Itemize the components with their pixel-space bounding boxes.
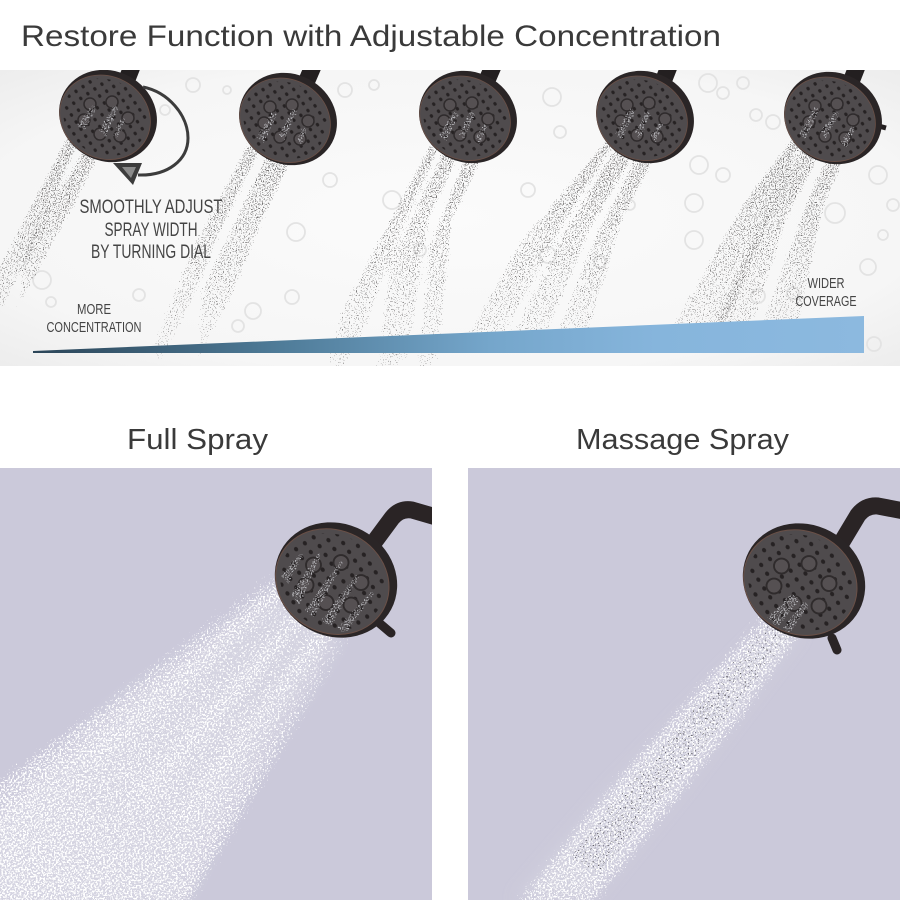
full spray shower arm [372,510,436,545]
full spray water [0,568,356,900]
shower head 1 [59,70,157,162]
icon: curved dial-turn arrow [113,87,188,185]
shower head 5 [784,70,887,164]
panel: massage spray [468,468,900,900]
water droplet texture [33,74,899,351]
massage spray water over nozzles [768,594,808,632]
full spray water over nozzles [280,552,375,634]
water streaks over heads [76,104,856,150]
full spray dial knob [378,622,391,633]
spray 5 [674,139,803,324]
gradient wedge scale [33,316,864,353]
massage spray dark droplets [570,626,790,874]
label: wider coverage: WIDER [808,275,845,292]
callout: smoothly adjust spray width: SMOOTHLY ADJUST [80,197,223,218]
shower head 3 [419,70,517,164]
label: wider coverage: COVERAGE [796,293,856,310]
heading: full spray: Full Spray [127,424,269,456]
heading: massage spray: Massage Spray [576,424,790,456]
massage spray shower head [742,523,866,639]
panel: adjustable concentration band [0,53,900,380]
callout: smoothly adjust spray width [80,197,223,263]
label: more concentration: CONCENTRATION [46,319,142,336]
shower head 4 [596,70,694,164]
shower heads: five settings [59,70,887,166]
full spray soft mist [0,590,340,900]
callout: smoothly adjust spray width: SPRAY WIDTH [104,220,198,241]
title: Restore Function with Adjustable Concentration [21,20,721,53]
spray 4 [470,142,616,332]
shower head 2 [239,70,337,166]
spray 1 [0,140,76,306]
massage spray dial knob [832,638,837,650]
water sprays: five width settings [0,139,840,366]
spray 2 [155,144,259,359]
panel: full spray [0,468,436,900]
massage spray shower arm [840,506,900,545]
full spray shower head [274,522,398,638]
spray 3 [330,144,441,366]
label: more concentration [46,301,142,336]
label: more concentration: MORE [77,301,111,318]
massage spray soft mist [548,644,772,888]
label: wider coverage [796,275,856,310]
callout: smoothly adjust spray width: BY TURNING DIAL [91,242,211,263]
massage spray water [505,610,806,900]
